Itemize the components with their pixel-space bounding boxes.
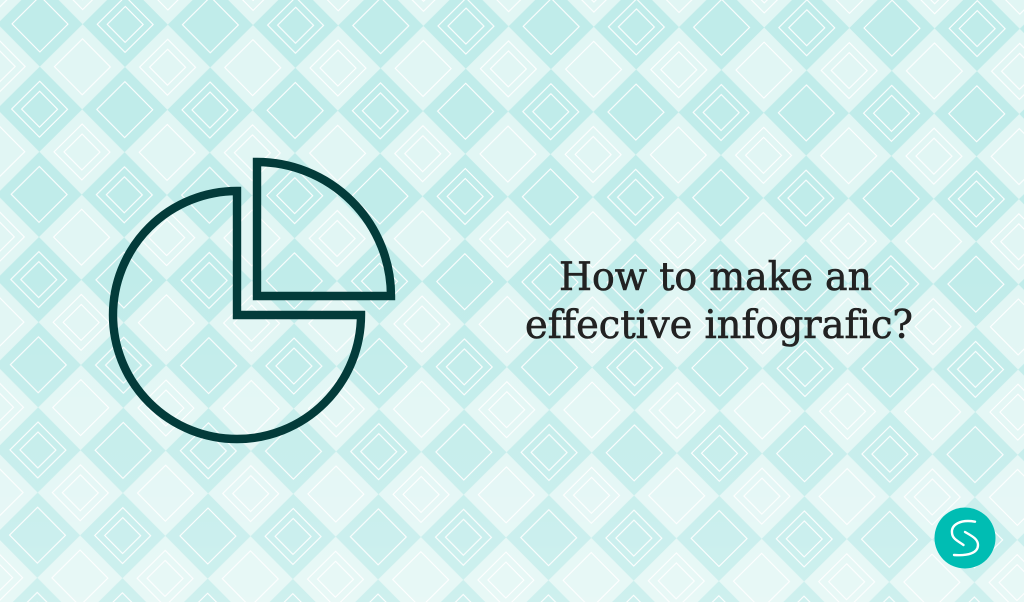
separated pie slice [257,162,391,296]
logo badge [934,508,996,568]
icon: pie chart [113,162,391,439]
title: effective infografic? [525,303,913,348]
title: How to make an [559,255,872,300]
main pie body [113,191,361,439]
title [525,255,913,348]
